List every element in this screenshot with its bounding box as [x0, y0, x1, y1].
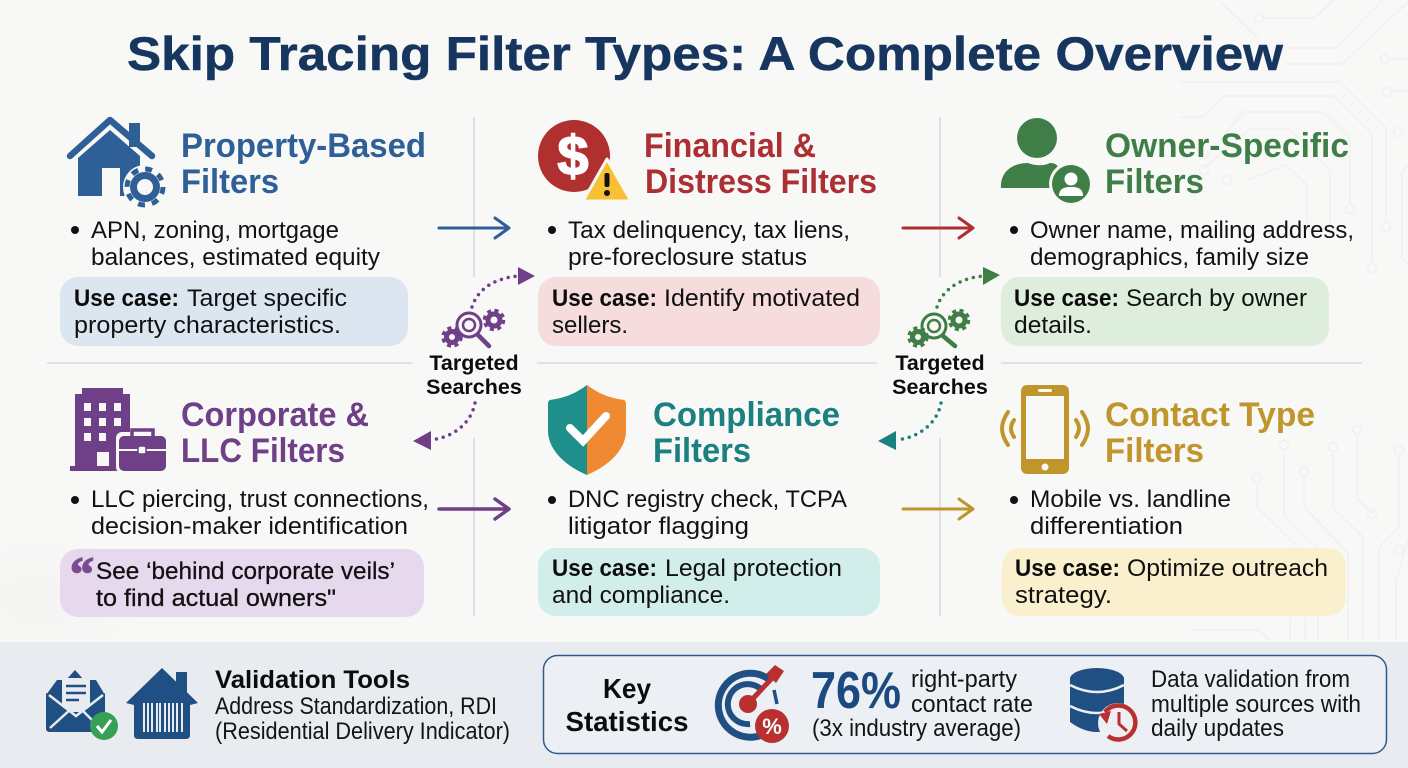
heading: Filters [653, 432, 751, 470]
panel: key statistics [544, 656, 1386, 754]
bullet text [548, 217, 850, 271]
heading [1105, 127, 1349, 201]
bullet text [71, 486, 429, 540]
footer band [0, 642, 1408, 768]
heading: Key [603, 673, 651, 704]
label [426, 351, 522, 399]
label: Searches [426, 375, 522, 399]
icon: dollar with warning [538, 120, 631, 201]
bullet text [548, 486, 848, 540]
validation tools text: (Residential Delivery Indicator) [215, 718, 510, 745]
icon: house with gear [70, 120, 167, 209]
heading: Property-Based [181, 127, 426, 165]
use case box [60, 277, 408, 346]
icon: mobile phone [1002, 385, 1088, 474]
statistic: data validation: daily updates [1151, 715, 1284, 742]
bullet text: pre-foreclosure status [568, 244, 807, 271]
bullet text: Owner name, mailing address, [1030, 217, 1354, 244]
icon: building with briefcase [70, 388, 168, 473]
heading: Corporate & [181, 396, 369, 434]
panel: contact type filters [1002, 385, 1346, 616]
dotted arrow down to corporate [413, 403, 475, 450]
bullet text [1010, 486, 1231, 540]
use case box: Use case: [74, 285, 179, 312]
use case box: strategy. [1015, 582, 1112, 609]
quote box [60, 548, 424, 617]
validation tools text: Validation Tools [215, 666, 410, 694]
statistic: data validation: multiple sources with [1151, 691, 1361, 718]
title: Skip Tracing Filter Types: A Complete Overview [127, 27, 1283, 80]
panel: property-based filters [60, 120, 426, 346]
arrow: corporate to compliance [439, 499, 509, 519]
heading: Statistics [566, 706, 688, 737]
use case box: sellers. [552, 312, 628, 339]
use case box: details. [1014, 312, 1092, 339]
dotted arrow up to financial [472, 267, 535, 307]
use case box: Search by owner [1126, 285, 1307, 312]
use case box: Legal protection [665, 555, 842, 582]
heading [181, 127, 426, 201]
heading: Distress Filters [645, 163, 877, 201]
validation tools text [215, 666, 510, 745]
icon: target with percent: % [762, 714, 782, 739]
label: Targeted [895, 351, 985, 375]
use case box [1001, 277, 1329, 346]
quote box: to find actual owners" [96, 585, 336, 612]
bullet text: decision-maker identification [91, 513, 408, 540]
icon: house with barcode [126, 668, 198, 739]
arrow: financial to owner [903, 218, 973, 238]
panel: owner-specific filters [1001, 118, 1354, 346]
dotted arrow up to owner [937, 267, 1000, 307]
label: Searches [892, 375, 988, 399]
use case box: Identify motivated [664, 285, 860, 312]
heading: Filters [1105, 163, 1204, 201]
heading: Financial & [644, 127, 816, 165]
icon: shield with check [548, 385, 626, 475]
validation tools text: Address Standardization, RDI [215, 693, 497, 720]
use case box: Optimize outreach [1127, 555, 1328, 582]
connector: left targeted searches [413, 267, 535, 450]
use case box: Target specific [187, 285, 347, 312]
panel: compliance filters [538, 385, 880, 616]
bullet text: demographics, family size [1030, 244, 1309, 271]
use case box: Use case: [552, 555, 657, 582]
heading: Filters [1105, 432, 1204, 470]
quote box: “ [70, 548, 94, 601]
heading [566, 673, 688, 737]
heading: Compliance [653, 396, 840, 434]
bullet text: Tax delinquency, tax liens, [568, 217, 850, 244]
use case box: Use case: [1015, 555, 1120, 582]
heading [653, 396, 840, 470]
heading: Filters [181, 163, 279, 201]
panel: financial and distress filters [538, 120, 880, 346]
use case box: and compliance. [552, 582, 730, 609]
heading: Contact Type [1105, 396, 1315, 434]
heading: LLC Filters [181, 432, 345, 470]
statistic: 76 percent [811, 662, 1033, 742]
heading [644, 127, 877, 201]
icon: database with clock [1070, 668, 1138, 743]
arrow: compliance to contact [903, 499, 973, 519]
bullet text: differentiation [1030, 513, 1183, 540]
icon: owner person [1001, 118, 1093, 206]
panel: corporate and LLC filters [60, 388, 429, 617]
heading: Owner-Specific [1105, 127, 1349, 165]
connector: right targeted searches [878, 267, 1000, 450]
bullet text: LLC piercing, trust connections, [91, 486, 429, 513]
bullet text: DNC registry check, TCPA [568, 486, 848, 513]
bullet text [1010, 217, 1354, 271]
arrow: property to financial [439, 218, 509, 238]
bullet text: APN, zoning, mortgage [91, 217, 339, 244]
label: Targeted [429, 351, 519, 375]
icon: envelope with check [46, 670, 118, 740]
quote box: See ‘behind corporate veils’ [96, 558, 395, 585]
statistic: data validation: Data validation from [1151, 666, 1350, 693]
heading [181, 396, 369, 470]
use case box: Use case: [1014, 285, 1119, 312]
use case box: Use case: [552, 285, 657, 312]
statistic: 76 percent: 76% [811, 662, 901, 720]
icon: target with percent [718, 665, 789, 743]
bullet text: balances, estimated equity [91, 244, 381, 271]
statistic: 76 percent: (3x industry average) [812, 715, 1021, 742]
use case box [538, 548, 880, 616]
bullet text [71, 217, 381, 271]
use case box: property characteristics. [74, 312, 341, 339]
dotted arrow down to compliance [878, 403, 941, 450]
icon: magnifier and gears [909, 310, 968, 346]
heading [1105, 396, 1315, 470]
bullet text: Mobile vs. landline [1030, 486, 1231, 513]
statistic: 76 percent: contact rate [911, 691, 1033, 718]
icon: dollar with warning: $ [557, 124, 589, 187]
statistic: data validation [1151, 666, 1361, 742]
use case box [1002, 548, 1346, 616]
icon: magnifier and gears [443, 310, 504, 346]
bullet text: litigator flagging [568, 513, 749, 540]
statistic: 76 percent: right-party [911, 666, 1017, 693]
label [892, 351, 988, 399]
use case box [538, 277, 880, 346]
